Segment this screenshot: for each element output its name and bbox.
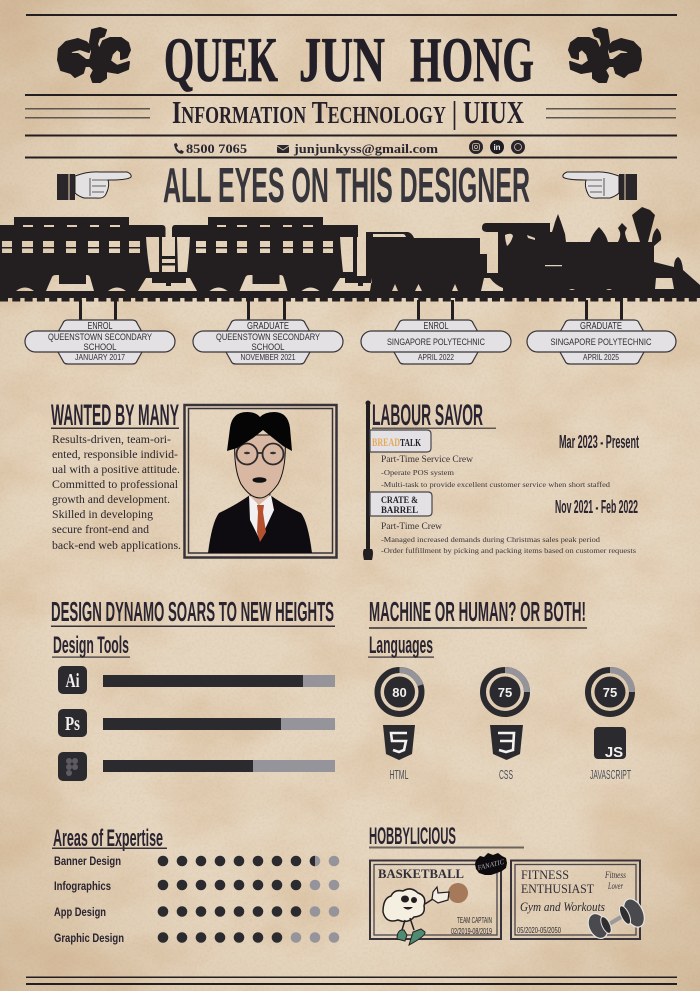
rating row: infographics: Infographics xyxy=(54,879,111,893)
suit xyxy=(208,495,312,553)
panel: machine or human xyxy=(368,596,632,782)
sign: Crate and Barrel xyxy=(370,492,432,516)
gauge: HTML 80 xyxy=(378,670,422,714)
text: DESIGN DYNAMO SOARS TO NEW HEIGHTS xyxy=(51,596,334,627)
subheading: Languages xyxy=(369,632,433,659)
summary text: Committed to professional xyxy=(52,479,178,491)
timeline tag: enrol Queenstown: QUEENSTOWN SECONDARY xyxy=(48,332,153,343)
title: name xyxy=(164,25,534,95)
hair xyxy=(227,412,292,451)
card: fitness: 05/2020-05/2050 xyxy=(517,926,561,935)
card: fitness: ENTHUSIAST xyxy=(521,881,594,896)
gauge: JavaScript 75: 75 xyxy=(603,685,617,700)
summary text: secure front-end and xyxy=(52,524,149,536)
gauge: JavaScript 75 xyxy=(588,670,632,714)
job 1 xyxy=(381,455,610,489)
sign: BreadTalk: TALK xyxy=(400,437,421,449)
rating row: app design xyxy=(54,905,339,919)
job 2: Part-Time Crew xyxy=(381,522,442,532)
rating row: infographics xyxy=(54,879,339,893)
badge: fanatic xyxy=(475,853,507,875)
illustration: steam train timeline xyxy=(0,207,700,320)
card: fitness xyxy=(511,860,648,942)
timeline tag: enrol Queenstown: ENROL xyxy=(88,321,113,332)
panel: hobbylicious xyxy=(369,823,648,945)
card: fitness: FITNESS xyxy=(521,867,569,882)
neck xyxy=(250,480,270,506)
card: basketball: BASKETBALL xyxy=(378,867,464,881)
tool: Illustrator: Ai xyxy=(66,670,80,692)
icon: left fleur ornament xyxy=(58,28,130,82)
email: junjunkyss@gmail.com xyxy=(293,141,438,156)
card: fitness: Fitness xyxy=(604,870,626,880)
job 2 xyxy=(381,522,636,555)
label: JAVASCRIPT xyxy=(590,767,631,782)
rating row: banner design: Banner Design xyxy=(54,854,121,868)
badge: fanatic: FANATIC xyxy=(476,858,505,872)
rating row: app design: App Design xyxy=(54,905,106,919)
rail track xyxy=(0,292,700,320)
rating row: graphic design: Graphic Design xyxy=(54,931,124,945)
timeline tag: graduate Singapore Polytechnic: APRIL 2025 xyxy=(583,353,619,362)
tool: Figma xyxy=(58,752,335,781)
timeline tag: enrol Singapore Polytechnic: APRIL 2022 xyxy=(418,353,454,362)
title: name: JUN xyxy=(299,25,385,95)
icon: whatsapp xyxy=(511,140,525,154)
job 2: -Order fulfillment by picking and packing items based on customer requests xyxy=(381,546,636,555)
summary text: back-end web applications. xyxy=(52,540,181,552)
icon: JS square xyxy=(594,727,626,761)
panel: labour savor: LABOUR SAVOR xyxy=(372,399,483,432)
train silhouette xyxy=(0,207,700,292)
caption: TEAM CAPTAIN xyxy=(457,916,492,925)
label: HTML xyxy=(390,767,408,782)
icon: basketball xyxy=(448,883,468,903)
card: fitness: Gym and Workouts xyxy=(520,899,605,914)
subheading: Design Tools xyxy=(53,632,129,659)
summary text: ual with a positive attitude. xyxy=(52,464,180,476)
text: WANTED BY MANY xyxy=(51,399,179,432)
timeline tag: graduate Queenstown: NOVEMBER 2021 xyxy=(240,353,296,362)
gauge: CSS 75 xyxy=(483,670,527,714)
timeline tag: enrol Queenstown xyxy=(25,320,175,364)
job 2: -Managed increased demands during Christmas sales peak period xyxy=(381,535,600,544)
rating row: graphic design xyxy=(54,931,339,945)
panel: hobbylicious: HOBBYLICIOUS xyxy=(369,823,456,850)
gauge: CSS 75: 75 xyxy=(498,685,512,700)
rating row: banner design xyxy=(54,854,339,868)
job 1: -Multi-task to provide excellent customer service when short staffed xyxy=(381,480,610,489)
timeline tag: enrol Singapore Polytechnic: SINGAPORE POLYTECHNIC xyxy=(387,337,485,348)
footer rules xyxy=(26,976,677,985)
summary text: Skilled in developing xyxy=(52,509,153,521)
icon: brain mascot xyxy=(383,887,449,945)
gauge: HTML 80: 80 xyxy=(392,685,407,700)
icon: CSS shield xyxy=(490,725,523,760)
timeline tag: enrol Singapore Polytechnic: ENROL xyxy=(424,321,449,332)
icon: right pointing hand xyxy=(563,172,637,200)
job 1: Part-Time Service Crew xyxy=(381,455,473,465)
header rules xyxy=(25,14,677,158)
card: basketball xyxy=(370,860,501,945)
mouth xyxy=(252,477,266,483)
summary text: ented, responsible individ- xyxy=(52,449,178,461)
sign: Crate and Barrel: CRATE & xyxy=(381,496,418,506)
timeline tag: enrol Queenstown: SCHOOL xyxy=(84,342,116,353)
contact row xyxy=(174,140,525,156)
icon: dumbbell xyxy=(584,896,648,942)
signpost pole xyxy=(363,400,373,560)
timeline tag: graduate Queenstown: QUEENSTOWN SECONDARY xyxy=(216,332,321,343)
panel: wanted by many xyxy=(51,399,181,552)
summary text xyxy=(52,434,181,552)
timeline tag: enrol Singapore Polytechnic xyxy=(361,320,511,364)
icon: JS square: JS xyxy=(605,744,623,761)
icon: mail xyxy=(277,145,289,153)
shirt xyxy=(249,495,274,540)
icon: instagram xyxy=(469,140,483,154)
icon: left pointing hand xyxy=(57,172,131,200)
panel: labour savor xyxy=(363,399,639,560)
sign: BreadTalk xyxy=(370,430,431,452)
job 1: -Operate POS system xyxy=(381,468,454,477)
subtitle: role: INFORMATION TECHNOLOGY | UIUX xyxy=(172,94,524,130)
sign: Crate and Barrel: BARREL xyxy=(381,506,418,516)
tool: Illustrator xyxy=(58,666,335,694)
timeline tag: graduate Queenstown: SCHOOL xyxy=(252,342,284,353)
title: name: HONG xyxy=(410,25,534,95)
timeline tag: graduate Singapore Polytechnic: GRADUATE xyxy=(580,321,622,332)
icon: phone xyxy=(174,143,184,154)
timeline tag: graduate Singapore Polytechnic xyxy=(527,320,676,364)
summary text: growth and development. xyxy=(52,494,170,506)
face xyxy=(235,435,285,498)
summary text: Results-driven, team-ori- xyxy=(52,434,171,446)
icon: right fleur ornament xyxy=(569,28,641,82)
label: CSS xyxy=(499,767,513,782)
icon: HTML shield xyxy=(383,725,415,760)
icon: linkedin xyxy=(490,140,504,154)
timeline tag: graduate Queenstown: GRADUATE xyxy=(247,321,289,332)
timeline tag: enrol Queenstown: JANUARY 2017 xyxy=(75,353,125,362)
panel: design dynamo xyxy=(51,596,335,781)
title: name: QUEK xyxy=(164,25,278,95)
tool: Photoshop: Ps xyxy=(65,713,80,735)
glasses xyxy=(236,444,284,464)
tie xyxy=(257,505,266,542)
card: basketball: 02/2019-08/2019 xyxy=(451,927,492,936)
icon: linkedin: in xyxy=(493,143,501,152)
card: fitness: Lover xyxy=(607,881,623,891)
sign: BreadTalk: BREAD xyxy=(372,435,400,449)
panel: areas of expertise xyxy=(52,825,339,945)
timeline tag: graduate Singapore Polytechnic: SINGAPORE POLYTECHNIC xyxy=(550,337,652,348)
portrait frame with cartoon designer xyxy=(184,405,336,558)
timeline tag: graduate Queenstown xyxy=(193,320,343,364)
window bars and ladder xyxy=(0,247,363,286)
phone number: 8500 7065 xyxy=(186,141,248,156)
tool: Photoshop xyxy=(58,709,335,737)
subheading: Areas of Expertise xyxy=(53,825,163,852)
